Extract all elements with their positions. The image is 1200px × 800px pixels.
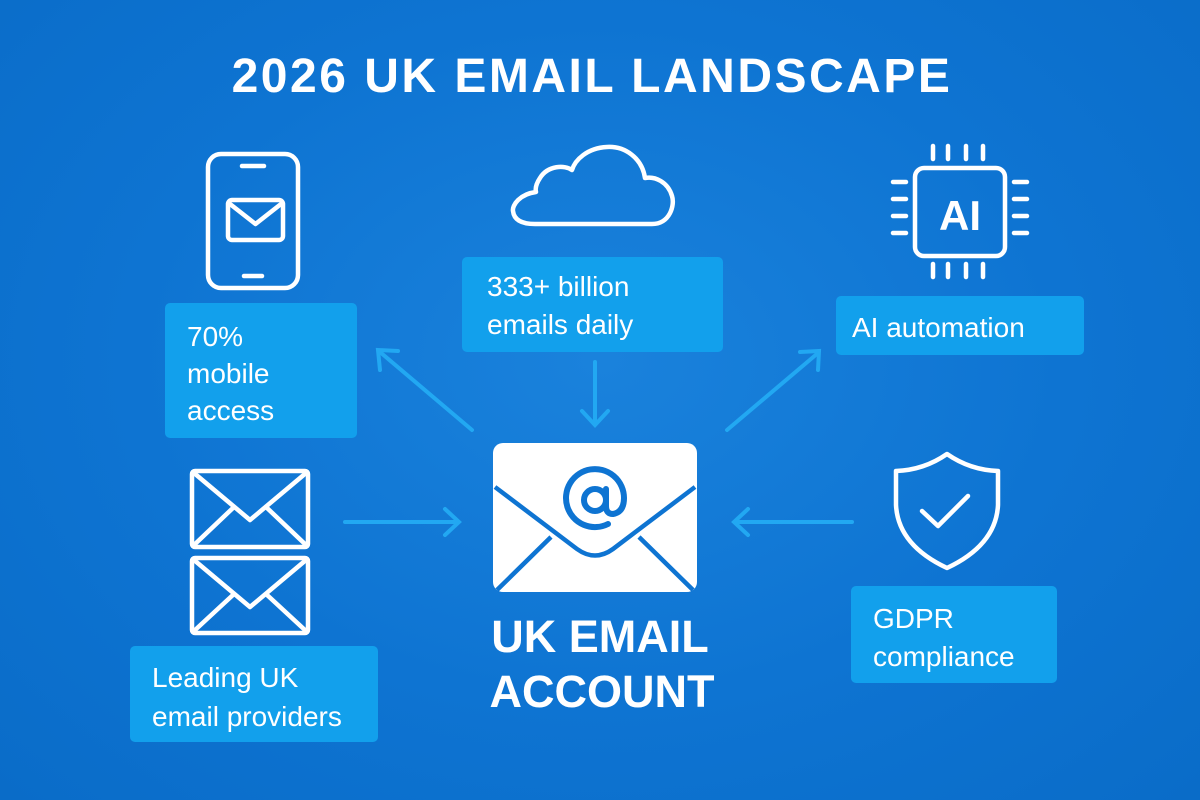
panel: emails daily: emails daily [487, 309, 633, 340]
panel: emails daily: 333+ billion [487, 271, 629, 302]
panel: mobile access [165, 303, 357, 438]
heading: UK email account [490, 611, 714, 717]
heading: UK email account: UK EMAIL [491, 611, 709, 662]
icon: cloud [513, 147, 673, 224]
icon: two envelopes [192, 471, 308, 633]
panel: mobile access: access [187, 395, 274, 426]
icon: AI chip: AI [939, 192, 981, 239]
panel: mobile access: 70% [187, 321, 243, 352]
title: 2026 UK EMAIL LANDSCAPE [232, 50, 952, 103]
icon: phone with envelope [208, 154, 298, 288]
panel: GDPR compliance: GDPR [873, 603, 954, 634]
panel: GDPR compliance [851, 586, 1057, 683]
panel: GDPR compliance: compliance [873, 641, 1015, 672]
panel: leading UK providers: email providers [152, 701, 342, 732]
arrow: center to AI [727, 351, 819, 430]
arrow: cloud to center [582, 362, 608, 425]
panel: leading UK providers: Leading UK [152, 662, 299, 693]
panel: mobile access: mobile [187, 358, 269, 389]
icon: shield [896, 454, 998, 568]
icon: central envelope [493, 443, 697, 592]
panel: AI automation: AI automation [852, 312, 1025, 343]
panel: leading UK providers [130, 646, 378, 742]
icon: AI chip [893, 146, 1027, 277]
panel: emails daily [462, 257, 723, 352]
arrow: GDPR to center [734, 509, 852, 535]
arrow: center to mobile [378, 350, 472, 430]
arrow: providers to center [345, 509, 459, 535]
heading: UK email account: ACCOUNT [490, 666, 714, 717]
panel: AI automation [836, 296, 1084, 355]
